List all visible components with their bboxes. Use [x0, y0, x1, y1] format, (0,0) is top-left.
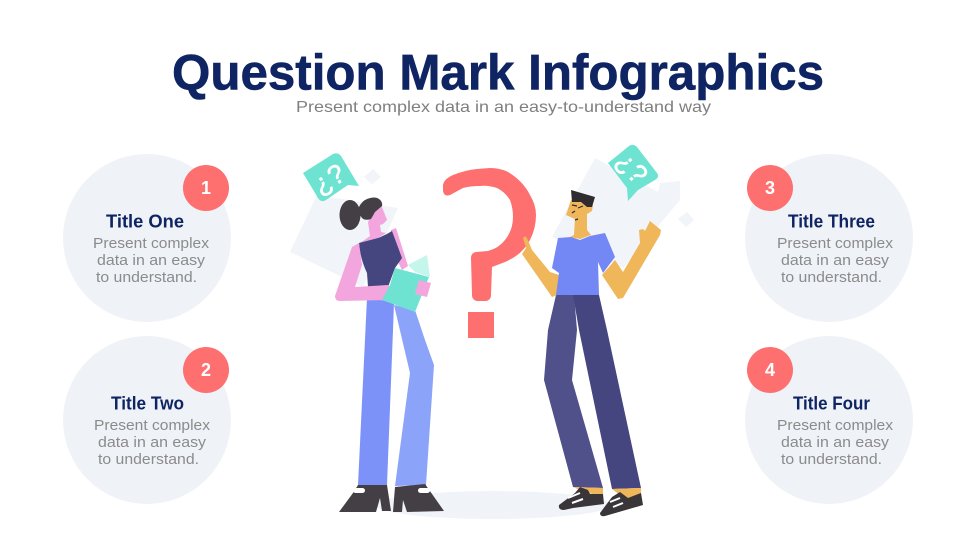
- woman top: [359, 231, 402, 287]
- badge 1: [183, 165, 229, 211]
- icon: speech bubble left: [303, 153, 359, 201]
- badge 3: [747, 165, 793, 211]
- woman ponytail: [340, 200, 360, 230]
- woman hair: [359, 198, 382, 220]
- woman trousers: [358, 298, 434, 486]
- badge 3: 3: [765, 178, 775, 198]
- text: item one body: to understand.: [96, 270, 197, 286]
- man right arm: [602, 221, 661, 299]
- woman right arm: [391, 228, 408, 270]
- heading: Title One: Title One: [106, 212, 184, 232]
- figure: man: [522, 190, 661, 516]
- heading: Title Four: Title Four: [793, 394, 870, 414]
- text: item two body: Present complex: [94, 418, 211, 434]
- ground shadow: [375, 491, 611, 519]
- text: item four body: [777, 418, 894, 468]
- man trousers: [544, 295, 641, 489]
- text: item three body: [777, 236, 894, 286]
- man hair: [571, 190, 595, 207]
- panel: item three: [745, 154, 913, 322]
- badge 2: 2: [201, 360, 211, 380]
- icon: speech bubble right: ¿?: [610, 146, 654, 190]
- woman left arm: [335, 243, 396, 301]
- icon: speech bubble right: [608, 145, 658, 201]
- woman head, neck and shoulders: [359, 203, 387, 243]
- badge 1: 1: [201, 178, 211, 198]
- text: item three body: Present complex: [777, 236, 894, 252]
- icon: large question mark: [443, 168, 536, 338]
- panel: item four: [745, 336, 913, 504]
- man shoes: [559, 487, 643, 516]
- woman shoes: [339, 484, 444, 512]
- text: item one body: Present complex: [93, 236, 210, 252]
- heading: Title Three: Title Three: [788, 212, 875, 232]
- man shirt: [552, 233, 615, 295]
- title: Question Mark Infographics: [172, 44, 824, 100]
- man socks: [573, 487, 641, 499]
- text: item one body: [93, 236, 210, 286]
- man left arm: [522, 236, 559, 297]
- text: item four body: data in an easy: [781, 435, 890, 451]
- text: item two body: to understand.: [98, 452, 199, 468]
- man face details: [572, 205, 583, 220]
- badge 4: [747, 347, 793, 393]
- icon: speech bubble left: ¿?: [308, 158, 350, 200]
- background shapes: [290, 158, 694, 287]
- badge 4: 4: [765, 360, 775, 380]
- panel: item two: [63, 336, 231, 504]
- text: item four body: to understand.: [781, 452, 882, 468]
- text: item one body: data in an easy: [97, 253, 206, 269]
- figure: woman: [335, 198, 444, 512]
- badge 2: [183, 347, 229, 393]
- man head and neck: [566, 200, 593, 239]
- text: item four body: Present complex: [777, 418, 894, 434]
- subtitle: Present complex data in an easy-to-understand way: [296, 99, 711, 116]
- text: item three body: to understand.: [781, 270, 882, 286]
- text: item three body: data in an easy: [781, 253, 890, 269]
- text: item two body: data in an easy: [98, 435, 207, 451]
- text: item two body: [94, 418, 211, 468]
- panel: item one: [63, 154, 231, 322]
- book: [382, 255, 431, 312]
- heading: Title Two: Title Two: [111, 394, 184, 414]
